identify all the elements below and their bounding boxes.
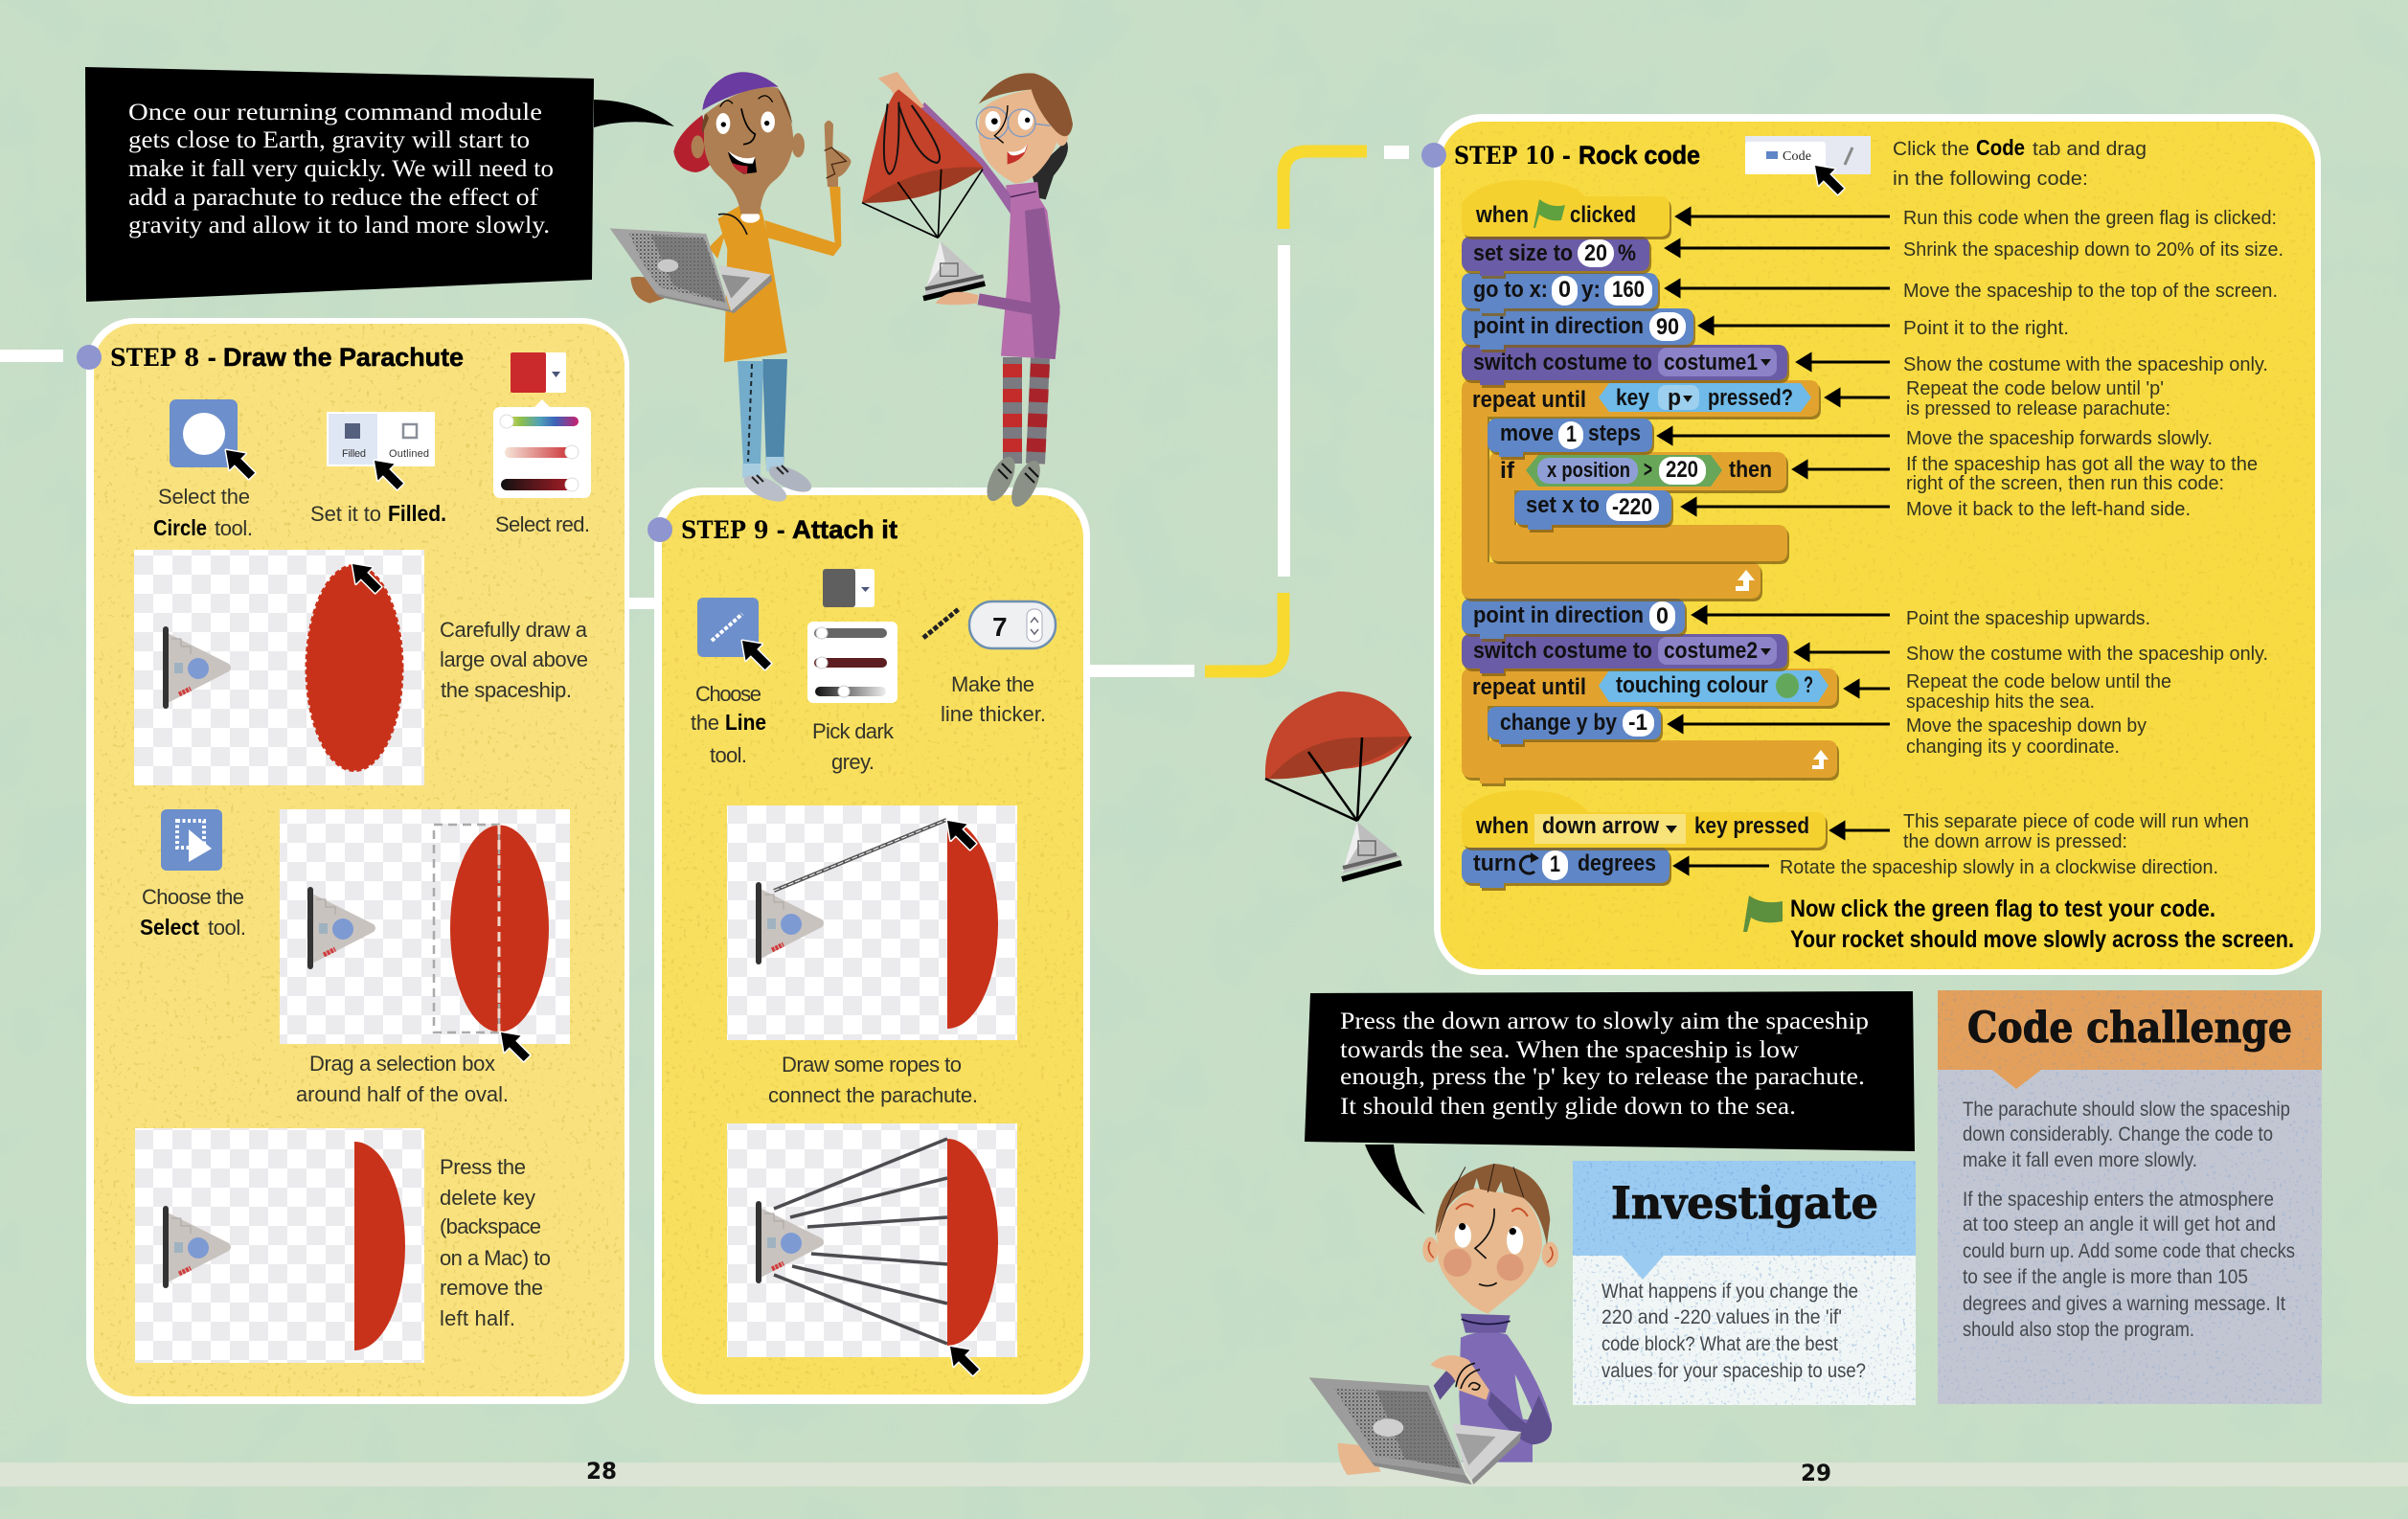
speech bubble: press the down arrow: enough, press the 'p' key to release the parachute. xyxy=(1340,1064,1865,1090)
text: draw some ropes: Draw some ropes to xyxy=(782,1053,962,1077)
block: repeat until key p: p xyxy=(1668,385,1681,411)
block: go to x y: 0 xyxy=(1558,277,1571,303)
canvas: half oval xyxy=(135,1128,424,1363)
block: when down arrow key pressed xyxy=(1462,790,1826,848)
block: move 1 steps: steps xyxy=(1588,420,1641,446)
text: press the delete key: on a Mac) to xyxy=(440,1246,551,1270)
block: set x to -220: -220 xyxy=(1612,494,1652,520)
icon: line thickness input: 7 xyxy=(992,612,1008,642)
block: change y loop: change y by xyxy=(1500,710,1618,736)
block: go to x y: y: xyxy=(1581,277,1601,303)
block: switch costume 1: costume1 xyxy=(1664,350,1758,375)
investigate heading: Investigate xyxy=(1611,1177,1878,1229)
icon: filled option xyxy=(327,412,435,494)
icon: code tab: Code xyxy=(1783,149,1811,164)
icon: select tool xyxy=(161,809,222,871)
investigate body text xyxy=(1602,1281,1866,1382)
text: choose the select tool: Choose the xyxy=(142,885,244,909)
block: set size: % xyxy=(1618,240,1636,266)
panel: step 10 rock code xyxy=(1421,114,2321,975)
block: point in direction 0 xyxy=(1462,599,1685,639)
annotations for code blocks: Move the spaceship forwards slowly. xyxy=(1906,428,2213,449)
speech bubble: press the down arrow: Press the down arrow to slowly aim the spaceship xyxy=(1340,1009,1869,1034)
text: draw some ropes xyxy=(768,1053,978,1107)
block: when flag clicked: clicked xyxy=(1570,202,1636,228)
block: go to x y: 160 xyxy=(1612,277,1645,303)
text: carefully draw a large oval: Carefully draw a xyxy=(440,618,588,642)
speech bubble: intro xyxy=(85,67,674,302)
block: point in direction 90: point in direction xyxy=(1473,313,1644,339)
block: if then: 220 xyxy=(1666,457,1698,483)
block: turn degrees: degrees xyxy=(1578,850,1656,876)
panel: investigate xyxy=(1573,1161,1916,1405)
text: select red: Select red. xyxy=(495,512,590,536)
block: change y loop: -1 xyxy=(1628,710,1647,736)
block: point in direction 90: 90 xyxy=(1656,314,1679,340)
annotations for code blocks: Point the spaceship upwards. xyxy=(1906,608,2150,629)
code challenge body text: If the spaceship enters the atmosphere xyxy=(1963,1189,2274,1211)
text: test your code xyxy=(1790,896,2294,953)
block: if then: if xyxy=(1500,458,1515,484)
block: turn degrees: turn xyxy=(1473,850,1516,876)
block: repeat until key p: repeat until xyxy=(1472,387,1586,413)
speech bubble: press the down arrow xyxy=(1305,991,1915,1214)
block: change y loop: ? xyxy=(1804,672,1813,698)
code challenge body text: at too steep an angle it will get hot and xyxy=(1963,1213,2276,1236)
text: test your code: Now click the green flag to test your code. xyxy=(1790,896,2215,922)
block: switch costume 2: switch costume to xyxy=(1473,638,1652,664)
block: switch costume 2: costume2 xyxy=(1664,638,1758,664)
page number 29: 29 xyxy=(1801,1460,1831,1486)
boy legs and shoes xyxy=(738,359,815,507)
text: click the code tab: in the following code: xyxy=(1893,169,2088,190)
block: point in direction 90 xyxy=(1462,308,1693,350)
code challenge body text: down considerably. Change the code to xyxy=(1963,1123,2273,1145)
text: press the delete key: (backspace xyxy=(440,1214,541,1238)
block: when down arrow key pressed: when xyxy=(1475,813,1529,839)
step 10 heading xyxy=(1421,141,1700,170)
text: select the circle tool xyxy=(153,485,253,540)
text: choose the line tool: tool. xyxy=(710,743,747,767)
block: switch costume 1: switch costume to xyxy=(1473,350,1652,375)
text: choose the select tool: tool. xyxy=(208,916,246,940)
speech bubble: press the down arrow: towards the sea. When the spaceship is low xyxy=(1340,1037,1799,1063)
block: turn degrees xyxy=(1462,848,1670,888)
icon: circle tool xyxy=(170,399,260,484)
connector lines between steps xyxy=(0,146,1409,677)
speech bubble: intro: gravity and allow it to land more slowly. xyxy=(128,213,550,238)
code stack: down arrow script xyxy=(1462,790,1826,888)
block: set size xyxy=(1462,237,1649,276)
illustration: girl holding parachute and capsule xyxy=(862,72,1073,510)
girl striped legs and shoes xyxy=(981,357,1046,510)
block: move 1 steps: move xyxy=(1500,420,1554,446)
block: if then xyxy=(1489,452,1787,561)
text: choose the select tool xyxy=(140,885,246,940)
investigate body text: What happens if you change the xyxy=(1602,1281,1858,1303)
text: press the delete key: Press the xyxy=(440,1155,526,1179)
text: drag a selection box: around half of the oval. xyxy=(296,1082,509,1106)
block: point in direction 0: 0 xyxy=(1656,603,1669,629)
text: press the delete key: left half. xyxy=(440,1306,515,1330)
text: press the delete key: delete key xyxy=(440,1186,535,1210)
investigate body text: code block? What are the best xyxy=(1602,1333,1838,1355)
illustration: boy with laptop xyxy=(610,72,851,507)
block: move 1 steps xyxy=(1488,419,1652,457)
code challenge body text: degrees and gives a warning message. It xyxy=(1963,1293,2285,1315)
code challenge heading: Code challenge xyxy=(1967,1004,2292,1053)
speech bubble: intro: gets close to Earth, gravity will start to xyxy=(128,127,530,153)
step 8 heading: Draw the Parachute xyxy=(223,343,464,372)
block: switch costume 2 xyxy=(1462,634,1787,673)
block: when flag clicked: when xyxy=(1475,202,1529,228)
text: choose the select tool: Select xyxy=(140,915,199,940)
text: set it to filled: Filled. xyxy=(388,501,446,526)
panel: step 8 draw the parachute xyxy=(77,318,629,1404)
annotations for code blocks: Run this code when the green flag is clicked: xyxy=(1903,208,2277,229)
panel: code challenge xyxy=(1938,990,2322,1404)
text: drag a selection box xyxy=(296,1052,509,1106)
step 10 heading: STEP 10 - xyxy=(1454,142,1571,170)
annotations for code blocks xyxy=(1780,208,2283,878)
icon: green flag xyxy=(1743,896,1783,932)
speech bubble: intro: Once our returning command module xyxy=(128,100,542,125)
code stack: main script xyxy=(1462,180,1837,783)
block: turn degrees: 1 xyxy=(1550,851,1560,877)
block: repeat until key p xyxy=(1462,380,1819,599)
text: press the delete key: remove the xyxy=(440,1276,543,1300)
canvas: selection box xyxy=(280,809,570,1066)
block: when down arrow key pressed: key pressed xyxy=(1694,813,1809,839)
icon: line tool xyxy=(697,598,776,674)
block: change y loop: touching colour xyxy=(1616,672,1768,698)
code challenge body text: The parachute should slow the spaceship xyxy=(1963,1099,2290,1121)
icon: red colour picker xyxy=(493,352,591,498)
block: when flag clicked xyxy=(1462,180,1670,237)
code challenge body text xyxy=(1963,1099,2295,1341)
text: click the code tab: Click the xyxy=(1893,139,1969,160)
text: carefully draw a large oval: large oval above xyxy=(440,647,588,671)
annotations for code blocks: Move it back to the left-hand side. xyxy=(1906,499,2191,520)
annotations for code blocks: right of the screen, then run this code: xyxy=(1906,473,2224,494)
speech bubble: intro: add a parachute to reduce the effect of xyxy=(128,185,539,211)
block: repeat until key p: pressed? xyxy=(1708,385,1793,411)
page number 28: 28 xyxy=(586,1458,617,1485)
canvas: first rope xyxy=(727,805,1017,1040)
speech bubble: intro: make it fall very quickly. We will need to xyxy=(128,156,554,182)
text: set it to filled xyxy=(310,501,446,526)
annotations for code blocks: changing its y coordinate. xyxy=(1906,737,2120,758)
block: when down arrow key pressed: down arrow xyxy=(1542,813,1659,839)
icon: line thickness input xyxy=(923,601,1056,648)
annotations for code blocks: Move the spaceship to the top of the screen. xyxy=(1903,281,2278,302)
step 9 heading: Attach it xyxy=(792,515,897,544)
text: choose the line tool xyxy=(691,682,766,767)
panel: step 9 attach it xyxy=(647,487,1090,1404)
text: set it to filled: Set it to xyxy=(310,502,381,526)
block: change y loop xyxy=(1462,669,1837,783)
text: choose the line tool: Line xyxy=(725,710,766,735)
canvas: draw oval xyxy=(134,550,424,785)
text: draw some ropes: connect the parachute. xyxy=(768,1083,978,1107)
code challenge body text: to see if the angle is more than 105 xyxy=(1963,1266,2248,1288)
annotations for code blocks: This separate piece of code will run when xyxy=(1903,811,2249,832)
block: set x to -220: set x to xyxy=(1526,492,1600,518)
icon: dark grey colour picker xyxy=(807,569,897,703)
step 8 heading xyxy=(77,343,464,372)
block: switch costume 1 xyxy=(1462,345,1787,385)
block: if then: then xyxy=(1729,457,1772,483)
text: drag a selection box: Drag a selection box xyxy=(309,1052,495,1076)
icon: code tab xyxy=(1745,136,1871,199)
block: point, switch lower blocks xyxy=(1462,180,1837,783)
text: select the circle tool: tool. xyxy=(215,516,253,540)
text: click the code tab: tab and drag xyxy=(2033,139,2147,160)
step 10 heading: Rock code xyxy=(1579,141,1700,170)
annotations for code blocks: Repeat the code below until 'p' xyxy=(1906,378,2164,399)
step 8 heading: STEP 8 - xyxy=(110,344,216,372)
annotations for code blocks: Show the costume with the spaceship only. xyxy=(1906,644,2268,665)
text: make the line thicker: line thicker. xyxy=(941,702,1046,726)
annotations for code blocks: spaceship hits the sea. xyxy=(1906,691,2095,713)
speech bubble: press the down arrow: It should then gently glide down to the sea. xyxy=(1340,1094,1796,1120)
annotations for code blocks: the down arrow is pressed: xyxy=(1903,831,2127,852)
annotations for code blocks: Point it to the right. xyxy=(1903,318,2069,339)
annotations for code blocks: Shrink the spaceship down to 20% of its size. xyxy=(1903,239,2283,261)
block: set x to -220 xyxy=(1514,490,1671,530)
annotations for code blocks: Show the costume with the spaceship only. xyxy=(1903,354,2268,375)
code challenge body text: could burn up. Add some code that checks xyxy=(1963,1240,2295,1262)
block: go to x y: go to x: xyxy=(1473,277,1548,303)
text: test your code: Your rocket should move slowly across the screen. xyxy=(1790,926,2294,953)
annotations for code blocks: Rotate the spaceship slowly in a clockwise direction. xyxy=(1780,857,2218,878)
illustration: falling parachute and capsule xyxy=(1265,691,1411,879)
block: repeat until key p: key xyxy=(1616,385,1650,411)
illustration: child with laptop xyxy=(1309,1164,1558,1485)
text: make the line thicker xyxy=(941,672,1046,726)
block: move 1 steps: 1 xyxy=(1566,421,1577,447)
text: select the circle tool: Select the xyxy=(158,485,250,509)
annotations for code blocks: Repeat the code below until the xyxy=(1906,671,2171,692)
text: select the circle tool: Circle xyxy=(153,515,207,540)
text: pick dark grey xyxy=(812,719,895,774)
code challenge body text: make it fall even more slowly. xyxy=(1963,1149,2197,1171)
canvas: all ropes xyxy=(727,1123,1017,1380)
block: change y loop: repeat until xyxy=(1472,674,1586,700)
icon: filled option: Outlined xyxy=(389,448,429,460)
text: press the delete key xyxy=(440,1155,551,1330)
annotations for code blocks: If the spaceship has got all the way to the xyxy=(1906,454,2258,475)
step 9 heading xyxy=(647,515,897,544)
investigate body text: 220 and -220 values in the 'if' xyxy=(1602,1306,1842,1328)
text: pick dark grey: Pick dark xyxy=(812,719,895,743)
annotations for code blocks: is pressed to release parachute: xyxy=(1906,398,2170,419)
text: click the code tab xyxy=(1893,135,2147,190)
block: point in direction 0: point in direction xyxy=(1473,602,1644,628)
block: set size: 20 xyxy=(1584,240,1607,266)
text: choose the line tool: the xyxy=(691,711,719,735)
text: pick dark grey: grey. xyxy=(831,750,875,774)
text: carefully draw a large oval: the spaceship. xyxy=(441,678,572,702)
block: set size: set size to xyxy=(1473,240,1573,266)
annotations for code blocks: Move the spaceship down by xyxy=(1906,715,2147,737)
text: click the code tab: Code xyxy=(1976,135,2025,160)
block: go to x y xyxy=(1462,273,1658,313)
block: if then: x position xyxy=(1547,458,1630,482)
text: make the line thicker: Make the xyxy=(951,672,1034,696)
icon: filled option: Filled xyxy=(342,448,366,460)
block: if then: > xyxy=(1644,457,1652,483)
text: choose the line tool: Choose xyxy=(695,682,761,706)
text: carefully draw a large oval xyxy=(440,618,588,702)
investigate body text: values for your spaceship to use? xyxy=(1602,1360,1866,1382)
code challenge body text: should also stop the program. xyxy=(1963,1319,2194,1341)
step 9 heading: STEP 9 - xyxy=(681,516,785,544)
arrows pointing at code blocks xyxy=(1659,209,1890,873)
